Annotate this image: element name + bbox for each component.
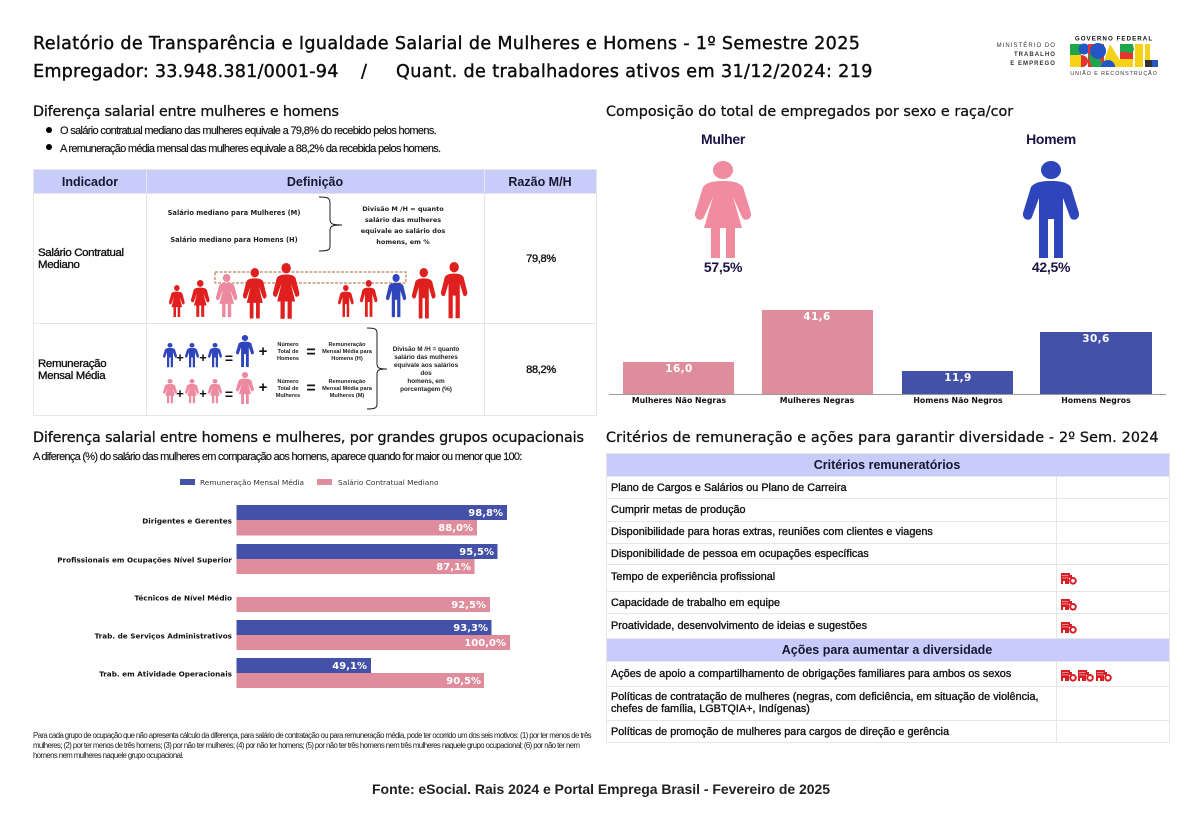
- bar chart: composição: 41,6: [803, 311, 831, 323]
- diagram: remuneração média: equivale aos salários: [394, 362, 459, 369]
- title: Empregador: 33.948.381/0001-94: [33, 62, 339, 82]
- bar chart: composição: 16,0: [665, 363, 693, 375]
- horizontal bar chart: 87,1%: [436, 562, 471, 573]
- bar chart: composição: 30,6: [1082, 333, 1110, 345]
- table: critérios e ações: Políticas de promoção de mulheres para cargos de direção e gerência: [611, 726, 949, 738]
- footnote: homens nem mulheres naquele grupo ocupacional.: [33, 751, 183, 760]
- table: critérios e ações: Critérios remuneratórios: [814, 458, 960, 472]
- table: indicadores: 88,2%: [526, 364, 556, 376]
- bullet list: [46, 125, 440, 155]
- horizontal bar chart: 90,5%: [446, 676, 481, 687]
- panel: diferença salarial: [33, 104, 597, 416]
- horizontal bar chart: 95,5%: [459, 547, 494, 558]
- diagram: remuneração média: +: [259, 379, 268, 396]
- table: indicadores: Definição: [287, 175, 343, 189]
- title: Relatório de Transparência e Igualdade Salarial de Mulheres e Homens - 1º Semestre 2025: [33, 34, 860, 54]
- horizontal bar chart: Trab. em Atividade Operacionais: [99, 670, 232, 678]
- diagram: remuneração média: =: [306, 380, 316, 397]
- table: indicadores: Remuneração: [38, 358, 106, 370]
- panel: critérios de remuneração: [606, 430, 1170, 743]
- diagram: remuneração média: Número: [277, 379, 299, 385]
- bar chart: composição: Mulheres Negras: [780, 396, 855, 405]
- table: indicadores: Mensal Média: [38, 370, 106, 382]
- diagram: remuneração média: =: [306, 344, 316, 361]
- horizontal bar chart: 98,8%: [468, 508, 503, 519]
- horizontal bar chart: Remuneração Mensal Média: [200, 478, 304, 487]
- logo: ministério: MINISTÉRIO DO: [997, 43, 1056, 49]
- diagram: remuneração média: Homens (H): [331, 356, 363, 362]
- diagram: remuneração média: Número: [277, 342, 299, 348]
- horizontal bar chart: Salário Contratual Mediano: [338, 478, 439, 487]
- table: critérios e ações: Plano de Cargos e Salários ou Plano de Carreira: [611, 482, 846, 494]
- diagram: salário mediano: homens, em %: [376, 238, 430, 246]
- diagram: remuneração média: salário das mulheres: [394, 354, 458, 361]
- diagram: remuneração média: =: [225, 350, 233, 366]
- footnote: Para cada grupo de ocupação que não apresenta cálculo da diferença, para salário de contratação ou para remuneração média, pode ter ocorrido um dos seis motivos: (1) por ter menos de três: [33, 731, 591, 740]
- diagram: salário mediano: Salário mediano para Mulheres (M): [168, 209, 300, 217]
- diagram: remuneração média: Mulheres (M): [330, 393, 364, 399]
- footnote: [33, 731, 592, 760]
- table: indicadores: Salário Contratual: [38, 247, 124, 259]
- title: /: [361, 62, 367, 82]
- heading: composição: Composição do total de empregados por sexo e raça/cor: [606, 104, 1013, 120]
- horizontal bar chart: 49,1%: [332, 661, 367, 672]
- logo: governo federal brasil: [1070, 36, 1158, 77]
- table: critérios e ações: Disponibilidade para horas extras, reuniões com clientes e viagens: [611, 526, 933, 538]
- heading: diferença salarial: Diferença salarial entre mulheres e homens: [33, 104, 339, 120]
- horizontal bar chart: Trab. de Serviços Administrativos: [95, 632, 232, 640]
- subtitle: A diferença (%) do salário das mulheres em comparação aos homens, aparece quando for maior ou menor que 100:: [33, 451, 522, 463]
- diagram: remuneração média: Mensal Média para: [322, 386, 373, 392]
- diagram: remuneração média: +: [199, 350, 207, 365]
- table: critérios e ações: [606, 453, 1170, 743]
- diagram: salário mediano: equivale ao salário dos: [361, 227, 445, 235]
- diagram: remuneração média: [163, 328, 459, 410]
- pictogram: mulher: [695, 131, 751, 275]
- table: critérios e ações: Capacidade de trabalho em equipe: [611, 597, 780, 609]
- panel: composição: [606, 104, 1166, 405]
- table: critérios e ações: Ações de apoio a compartilhamento de obrigações familiares para ambos os sexos: [611, 668, 1012, 680]
- diagram: remuneração média: Mensal Média para: [322, 349, 373, 355]
- table: indicadores: Mediano: [38, 259, 80, 271]
- bullet list: A remuneração média mensal das mulheres equivale a 88,2% da recebida pelos homens.: [60, 142, 440, 154]
- diagram: remuneração média: +: [176, 386, 184, 401]
- horizontal bar chart: 93,3%: [453, 623, 488, 634]
- table: critérios e ações: Proatividade, desenvolvimento de ideias e sugestões: [611, 620, 868, 632]
- pictogram: homem: Homem: [1026, 131, 1076, 147]
- horizontal bar chart: Técnicos de Nível Médio: [134, 594, 232, 602]
- horizontal bar chart: Profissionais em Ocupações Nível Superior: [57, 556, 232, 564]
- title: Quant. de trabalhadores ativos em 31/12/2024: 219: [396, 62, 873, 82]
- table: indicadores: [33, 169, 597, 416]
- panel: grupos ocupacionais: [33, 430, 592, 760]
- logo: governo federal brasil: UNIÃO E RECONSTRUÇÃO: [1070, 70, 1158, 77]
- diagram: salário mediano: salário das mulheres: [365, 216, 441, 224]
- table: critérios e ações: Políticas de contratação de mulheres (negras, com deficiência, em situação de violência,: [611, 691, 1039, 703]
- logo: ministério: E EMPREGO: [1010, 61, 1056, 67]
- bar chart: composição: 11,9: [944, 372, 972, 384]
- source: Fonte: eSocial. Rais 2024 e Portal Emprega Brasil - Fevereiro de 2025: [372, 781, 830, 797]
- logo: ministério: [997, 41, 1056, 67]
- horizontal bar chart: Dirigentes e Gerentes: [142, 516, 232, 526]
- diagram: remuneração média: Remuneração: [328, 379, 366, 385]
- diagram: remuneração média: +: [259, 343, 268, 360]
- diagram: remuneração média: Total de: [277, 386, 299, 392]
- horizontal bar chart: [57, 478, 510, 688]
- heading: grupos ocupacionais: Diferença salarial entre homens e mulheres, por grandes grupos ocupacionais: [33, 430, 584, 446]
- table: indicadores: Indicador: [62, 175, 118, 189]
- heading: critérios: Critérios de remuneração e ações para garantir diversidade - 2º Sem. 2024: [606, 430, 1159, 446]
- diagram: remuneração média: homens, em: [407, 378, 445, 385]
- bar chart: composição: Mulheres Não Negras: [632, 396, 727, 405]
- diagram: salário mediano: Salário mediano para Homens (H): [170, 236, 298, 244]
- pictogram: homem: 42,5%: [1032, 259, 1071, 275]
- table: indicadores: Razão M/H: [508, 175, 572, 189]
- horizontal bar chart: 92,5%: [451, 600, 486, 611]
- diagram: remuneração média: Remuneração: [328, 342, 366, 348]
- pictogram: mulher: 57,5%: [704, 259, 743, 275]
- table: critérios e ações: Tempo de experiência profissional: [611, 571, 775, 583]
- pictogram: mulher: Mulher: [701, 131, 746, 147]
- table: critérios e ações: Disponibilidade de pessoa em ocupações específicas: [611, 548, 869, 560]
- diagram: remuneração média: Total de: [277, 349, 299, 355]
- pictogram: homem: [1023, 131, 1079, 275]
- logo: ministério: TRABALHO: [1014, 52, 1056, 58]
- bar chart: composição: Homens Negros: [1061, 396, 1131, 405]
- bar chart: composição: [609, 310, 1166, 405]
- diagram: remuneração média: dos: [420, 370, 432, 377]
- diagram: remuneração média: +: [176, 350, 184, 365]
- diagram: remuneração média: Homens: [277, 356, 299, 362]
- diagram: salário mediano: [168, 196, 468, 319]
- diagram: remuneração média: Divisão M /H = quanto: [393, 346, 459, 353]
- bullet list: O salário contratual mediano das mulheres equivale a 79,8% do recebido pelos homens.: [60, 125, 436, 137]
- title: [33, 34, 873, 82]
- diagram: remuneração média: =: [225, 386, 233, 402]
- diagram: salário mediano: Divisão M /H = quanto: [362, 205, 444, 213]
- logo: governo federal brasil: GOVERNO FEDERAL: [1075, 36, 1153, 42]
- table: indicadores: 79,8%: [526, 253, 556, 265]
- table: critérios e ações: Ações para aumentar a diversidade: [782, 643, 992, 657]
- horizontal bar chart: 88,0%: [438, 523, 473, 534]
- bar chart: composição: Homens Não Negros: [913, 396, 1003, 405]
- diagram: remuneração média: porcentagem (%): [400, 386, 452, 393]
- horizontal bar chart: 100,0%: [464, 638, 506, 649]
- footnote: mulheres; (2) por ter menos de três homens; (3) por não ter mulheres; (4) por não ter homens; (5) por não ter três homens nem três mulheres naquele grupo ocupacional; (6) por não ter nem: [33, 741, 579, 750]
- table: critérios e ações: chefes de família, LGBTQIA+, Indígenas): [611, 703, 810, 715]
- diagram: remuneração média: Mulheres: [276, 393, 300, 399]
- diagram: remuneração média: +: [199, 386, 207, 401]
- table: critérios e ações: Cumprir metas de produção: [611, 504, 746, 516]
